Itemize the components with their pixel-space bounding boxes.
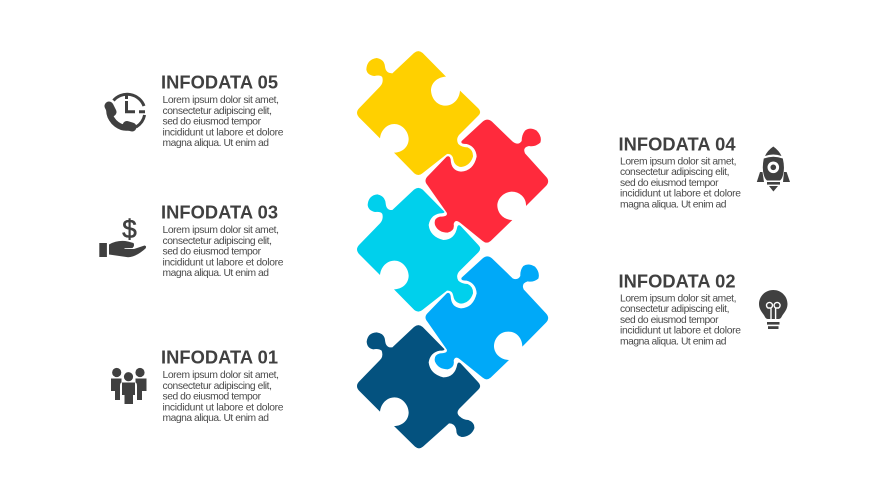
text block: infodata 01 bbox=[161, 346, 284, 424]
text block: infodata 03: INFODATA 03 bbox=[161, 202, 278, 222]
text block: infodata 02 bbox=[618, 270, 741, 347]
puzzle piece: red bbox=[425, 120, 548, 243]
text block: infodata 03 bbox=[161, 202, 284, 279]
text block: infodata 04 bbox=[618, 134, 741, 210]
text block: infodata 04: incididunt ut labore et dolore bbox=[620, 188, 741, 200]
text block: infodata 04: magna aliqua. Ut enim ad bbox=[620, 199, 727, 210]
text block: infodata 05: Lorem ipsum dolor sit amet, bbox=[162, 95, 279, 106]
text block: infodata 03: sed do eiusmod tempor bbox=[162, 246, 262, 258]
icon: rocket bbox=[757, 146, 790, 192]
puzzle piece: cyan bbox=[357, 188, 480, 312]
text block: infodata 03: magna aliqua. Ut enim ad bbox=[162, 268, 269, 279]
text block: infodata 05: INFODATA 05 bbox=[161, 72, 278, 92]
puzzle piece: navy bbox=[357, 325, 480, 448]
text block: infodata 04: INFODATA 04 bbox=[618, 134, 736, 154]
text block: infodata 02: sed do eiusmod tempor bbox=[620, 315, 719, 326]
text block: infodata 05: magna aliqua. Ut enim ad bbox=[162, 138, 269, 149]
text block: infodata 01: consectetur adipiscing elit, bbox=[162, 381, 272, 392]
icon: hand with dollar bbox=[99, 214, 146, 257]
text block: infodata 03: incididunt ut labore et dolore bbox=[162, 257, 284, 268]
text block: infodata 01: Lorem ipsum dolor sit amet, bbox=[162, 370, 279, 381]
icon: phone and clock bbox=[109, 94, 145, 128]
text block: infodata 04: consectetur adipiscing elit, bbox=[620, 167, 730, 178]
puzzle piece: yellow bbox=[357, 51, 480, 175]
icon: group of people bbox=[111, 368, 146, 404]
text block: infodata 03: consectetur adipiscing elit, bbox=[162, 236, 272, 247]
text block: infodata 05 bbox=[161, 72, 284, 149]
puzzle graphic bbox=[357, 51, 548, 448]
text block: infodata 02: consectetur adipiscing elit, bbox=[620, 304, 730, 315]
text block: infodata 02: incididunt ut labore et dolore bbox=[620, 326, 741, 336]
text block: infodata 02: Lorem ipsum dolor sit amet, bbox=[620, 293, 736, 304]
icon: light bulb bbox=[759, 290, 788, 329]
icon: hand with dollar: $ bbox=[122, 214, 137, 244]
text block: infodata 01: magna aliqua. Ut enim ad bbox=[162, 413, 269, 424]
puzzle piece: blue bbox=[425, 256, 548, 379]
text block: infodata 05: sed do eiusmod tempor bbox=[162, 116, 262, 128]
text block: infodata 01: incididunt ut labore et dolore bbox=[162, 402, 284, 413]
text block: infodata 02: INFODATA 02 bbox=[618, 270, 736, 292]
text block: infodata 03: Lorem ipsum dolor sit amet, bbox=[162, 225, 279, 236]
text block: infodata 02: magna aliqua. Ut enim ad bbox=[620, 336, 727, 347]
text block: infodata 01: INFODATA 01 bbox=[161, 346, 278, 368]
text block: infodata 05: consectetur adipiscing elit, bbox=[162, 106, 272, 117]
text block: infodata 04: sed do eiusmod tempor bbox=[620, 178, 719, 189]
text block: infodata 01: sed do eiusmod tempor bbox=[162, 392, 262, 402]
text block: infodata 04: Lorem ipsum dolor sit amet, bbox=[620, 156, 736, 167]
text block: infodata 05: incididunt ut labore et dolore bbox=[162, 127, 284, 138]
